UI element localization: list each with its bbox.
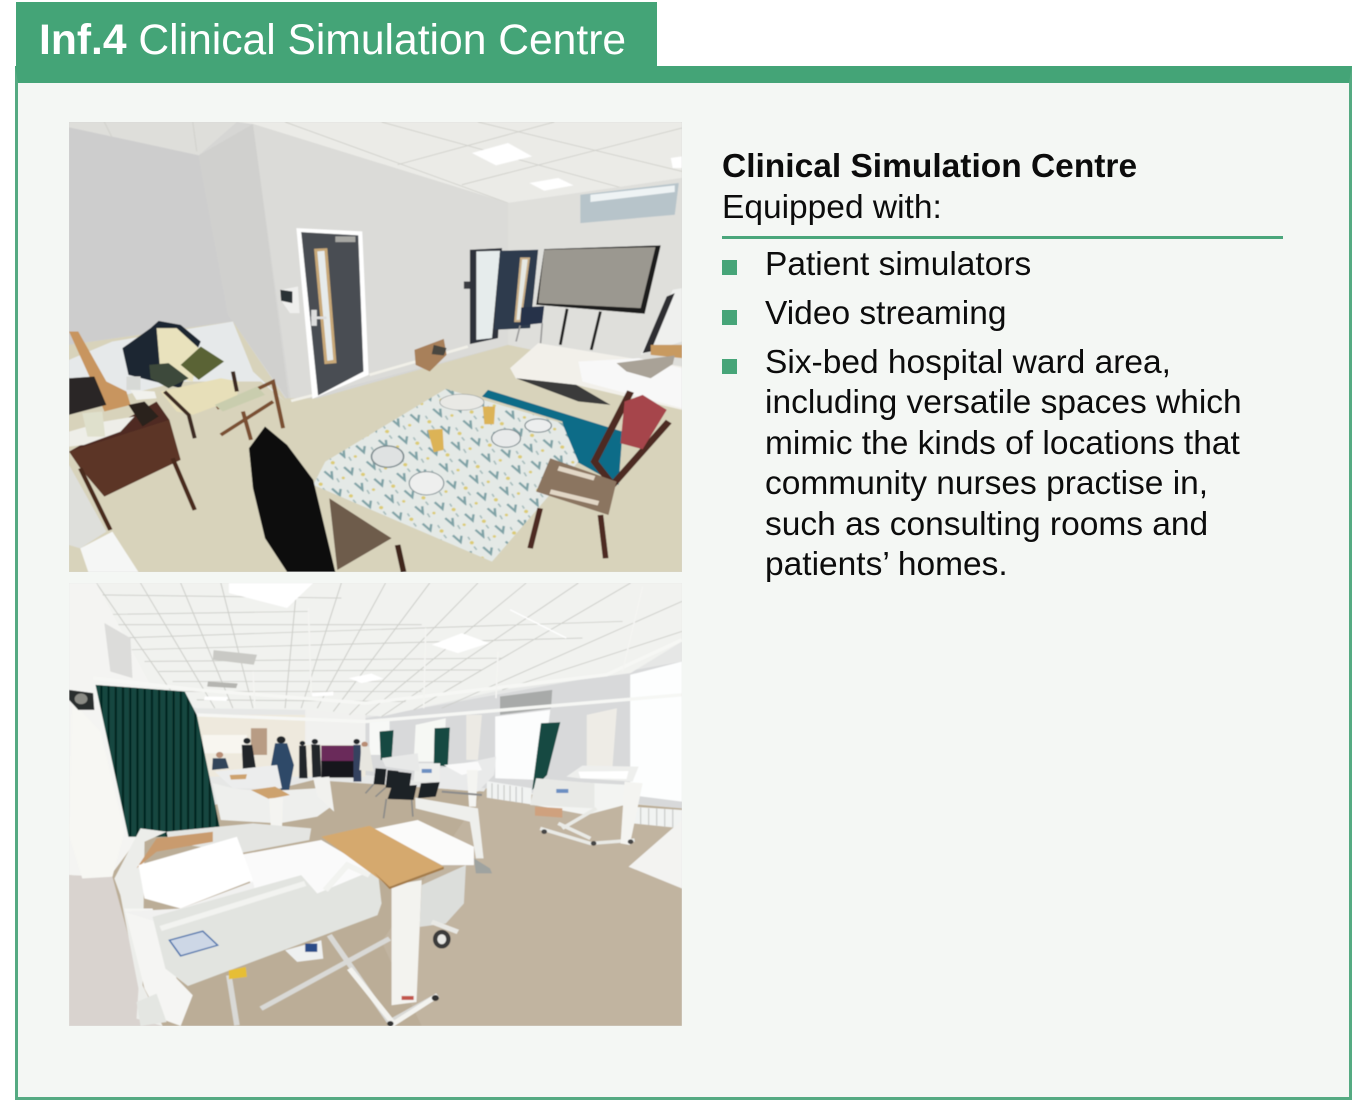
skirting [291, 346, 468, 401]
bullet: ward area [722, 359, 737, 374]
door [296, 228, 369, 399]
text block: heading [722, 148, 1137, 226]
rear door [470, 248, 538, 344]
foreground bed [114, 798, 492, 1026]
bullet: patient simulators [722, 260, 737, 275]
mid beds [213, 753, 496, 832]
low white wall [69, 321, 285, 408]
radiators [487, 781, 682, 828]
stacking chair [516, 306, 544, 343]
item: video streaming: Video streaming [765, 295, 1006, 332]
green privacy curtain [96, 685, 222, 837]
stacked chairs [373, 768, 440, 800]
header tab [16, 2, 657, 68]
bed frame [229, 935, 438, 1025]
far-right bed [530, 766, 643, 846]
people [212, 736, 373, 790]
bullet list [722, 246, 1242, 583]
divider [722, 236, 1283, 239]
item: ward area: including versatile spaces which [765, 384, 1242, 421]
basket [414, 339, 447, 372]
table with cloth [313, 389, 578, 562]
curtain rails [93, 640, 682, 722]
ceiling [69, 583, 682, 717]
right chair [530, 392, 669, 558]
item: ward area: Six-bed hospital ward area, [765, 344, 1171, 381]
bed [510, 343, 682, 410]
high window [580, 183, 679, 223]
item: ward area [765, 344, 1242, 583]
floor [69, 321, 682, 572]
back room [197, 708, 365, 778]
chair with black jacket [249, 427, 404, 572]
item: ward area: patients’ homes. [765, 546, 1008, 583]
item: ward area: mimic the kinds of locations that [765, 425, 1240, 462]
item: patient simulators: Patient simulators [765, 246, 1031, 283]
adjacent bed edge [629, 820, 682, 888]
photo: six-bed hospital ward [69, 583, 682, 1026]
intercom [280, 286, 300, 313]
bullet: video streaming [722, 310, 737, 325]
armchair [122, 321, 283, 440]
title: Inf.4 Clinical Simulation Centre [39, 16, 626, 64]
floor [69, 780, 682, 1026]
blind display board [536, 245, 661, 350]
overbed table [321, 826, 444, 1026]
item: ward area: such as consulting rooms and [765, 506, 1208, 543]
left wall [69, 583, 217, 1026]
back curtains [380, 722, 560, 790]
photo: community room simulation [69, 122, 682, 572]
walls [69, 124, 682, 402]
rug [482, 390, 623, 485]
desk and lamp [69, 331, 195, 530]
mirror [641, 288, 682, 358]
subheading bold: Clinical Simulation Centre [722, 148, 1137, 185]
item: ward area: community nurses practise in, [765, 465, 1208, 502]
right wall and windows [365, 661, 682, 808]
subheading regular: Equipped with: [722, 189, 942, 226]
ceiling [69, 122, 682, 203]
wall and radiator [69, 465, 138, 572]
